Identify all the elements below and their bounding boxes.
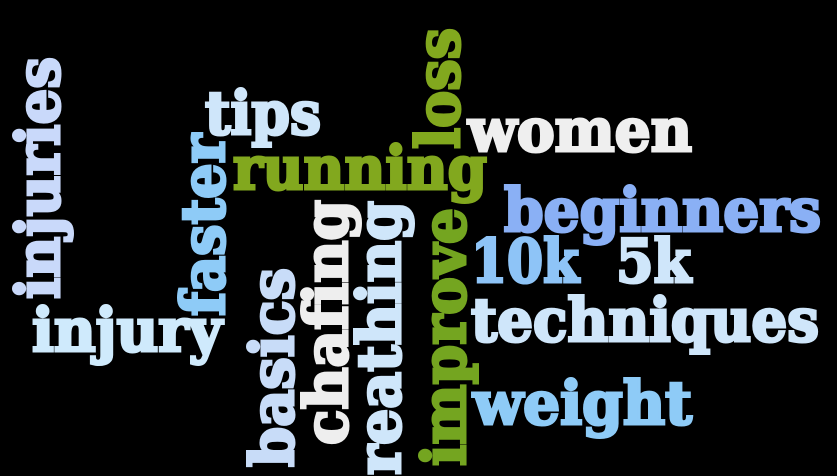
- word: women: women: [467, 96, 692, 166]
- word: basics: basics: [238, 268, 308, 467]
- word: faster: faster: [169, 133, 239, 316]
- word: 10k: 10k: [471, 227, 580, 297]
- word: techniques: techniques: [471, 286, 819, 356]
- word: breathing: reathing: [345, 201, 415, 475]
- word: tips: tips: [205, 79, 321, 149]
- word: injury: injury: [32, 296, 224, 366]
- word: beginners: beginners: [504, 176, 821, 246]
- word: injuries: injuries: [4, 57, 74, 299]
- word: running: running: [233, 134, 487, 204]
- word: loss: loss: [404, 28, 474, 149]
- word: weight: weight: [472, 369, 692, 439]
- word: chafing: chafing: [292, 200, 362, 445]
- word: improve: improve: [410, 208, 480, 466]
- word: 5k: 5k: [616, 227, 692, 297]
